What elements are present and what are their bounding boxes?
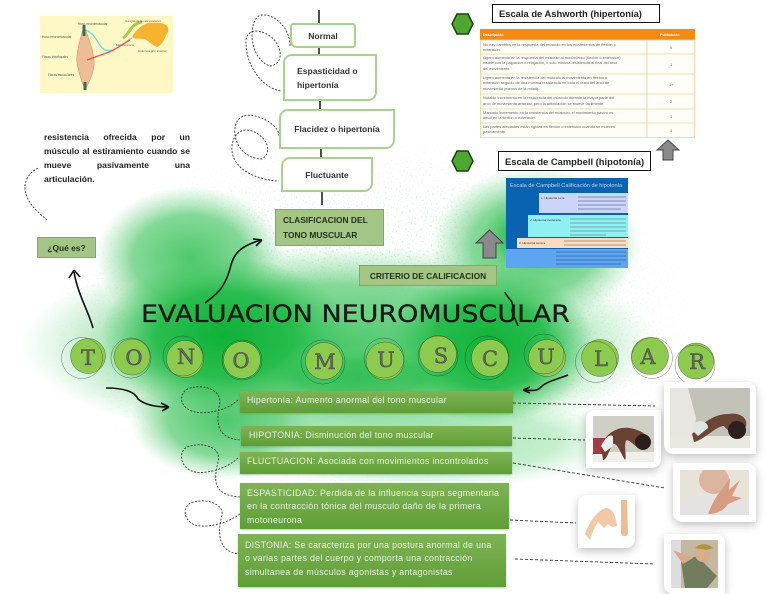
question label: ¿Qué es? <box>47 242 86 252</box>
letter O: O <box>232 349 250 373</box>
criteria label <box>359 265 497 286</box>
table: Ashworth scale: No hay cambios en la respuesta del músculo en los movimientos de flexión o <box>483 42 616 47</box>
table: Ashworth scale: difícil en la flexión o extensión. <box>483 115 536 120</box>
muscle spindle diagram: Motoneurona <box>116 43 134 47</box>
letter U: U <box>537 345 555 369</box>
muscle fibre <box>77 26 94 90</box>
tier 2 <box>528 215 628 237</box>
dashed loops near flow chart <box>25 15 290 220</box>
letter T <box>62 338 106 378</box>
table: Ashworth scale: 3 <box>670 114 672 119</box>
muscle spindle diagram: Fibras intrafusales <box>42 55 68 59</box>
arrow up: Campbell <box>475 229 504 258</box>
table: Campbell scale: Escala de Campbell Calificación de hipotonía <box>510 183 623 189</box>
letter circles: TONO MUSCULAR <box>61 334 716 384</box>
table: Ashworth scale: 1 <box>670 62 672 67</box>
definition: Fluctuacion: FLUCTUACION: Asociada con movimientos incontrolados <box>247 456 489 466</box>
muscle spindle diagram: Fibras musculares <box>48 73 74 77</box>
photo: dystonia posture <box>664 534 725 594</box>
curved arrows <box>69 239 568 411</box>
letter U <box>364 338 404 380</box>
photo: infant hypotonia <box>586 410 661 468</box>
table: Campbell scale: 3. Hipotonía severa <box>519 241 545 245</box>
table: Campbell scale: 1. Hipotonía Leve <box>541 196 565 200</box>
definition: Fluctuacion <box>240 452 512 474</box>
letter O <box>111 338 151 378</box>
flow box: Fluctuante: Fluctuante <box>305 170 349 180</box>
table: Ashworth scale: Notable incremento en la resistencia del músculo durante la mayor parte del <box>483 95 614 100</box>
title: Ashworth scale <box>492 4 660 23</box>
letter M <box>301 340 345 384</box>
table: Ashworth scale: Ligero aumento en la respuesta del músculo al movimiento (flexión ó extensión) <box>483 55 621 60</box>
tier 3 <box>517 238 628 248</box>
dashed connectors to photos <box>510 403 665 564</box>
dashed loops near definitions <box>182 387 240 554</box>
definition: Distonia: o varias partes del cuerpo y comporta una contracción <box>245 553 473 563</box>
photo: infant hypertonia <box>664 382 756 454</box>
table: Ashworth scale: 1+ <box>669 82 674 87</box>
table: Ashworth scale: 0 <box>670 45 673 50</box>
definition: Distonia: DISTONIA: Se caracteriza por una postura anormal de una <box>245 540 492 550</box>
definition: Distonia: simultanea de músculos agonistas y antagonistas <box>245 567 453 577</box>
letter O <box>222 340 262 380</box>
letter N <box>163 336 204 378</box>
table: Ashworth scale: Las partes afectadas están rígidas en flexión o extensión cuando se mueven <box>483 124 615 129</box>
letter A <box>632 338 672 378</box>
table: Ashworth scale: Ligero aumento en la resistencia del músculo al movimiento en flexión o <box>483 75 607 80</box>
flow box: Normal <box>290 23 356 48</box>
hexagon icon: Campbell <box>451 150 474 172</box>
flow spine <box>319 10 322 205</box>
green paint splash background <box>31 148 680 483</box>
flow box: Espasticidad <box>283 54 377 101</box>
letter N: N <box>177 345 195 369</box>
definition: Hipertonia: Hipertonía: Aumento anormal del tono muscular <box>247 395 447 405</box>
table: Ashworth scale: movimiento (menos de la mitad). <box>483 86 539 91</box>
table: Ashworth scale: 4 <box>670 128 673 133</box>
letter A: A <box>639 345 656 369</box>
definition: Hipertonia <box>240 391 513 413</box>
letter M: M <box>314 350 336 374</box>
table: Ashworth scale: 2 <box>670 99 672 104</box>
photo: flexed arm and hand <box>578 495 635 548</box>
letter U <box>524 334 566 376</box>
muscle spindle diagram: Huso neuromuscular <box>78 22 108 26</box>
Campbell lower band <box>506 248 628 268</box>
flow box: Fluctuante <box>281 157 373 192</box>
muscle spindle diagram: Columna gris anterior <box>138 49 167 53</box>
flow box: Flacidez <box>279 109 395 149</box>
definition text: resistencia ofrecida por un músculo al estiramiento cuando se mueve pasivamente una articulación. <box>44 132 190 184</box>
table: Ashworth scale: pasivamente. <box>483 129 506 134</box>
table: Ashworth scale: Marcado incremento en la resistencia del músculo, el movimiento pasivo es <box>483 110 613 115</box>
title: Campbell scale <box>498 151 651 171</box>
letter L: L <box>594 347 608 371</box>
definition: Espasticidad: motoneurona <box>247 515 302 525</box>
table: Campbell scale: 2. Hipotonía moderada <box>530 218 561 222</box>
tier 1 <box>539 193 628 213</box>
letter O: O <box>125 346 143 370</box>
classification label: TONO MUSCULAR <box>283 230 357 240</box>
arrow up: Ashworth <box>656 140 680 160</box>
definition: Espasticidad: en la contracción tónica del musculo daño de la primera <box>247 501 481 511</box>
table: Ashworth scale: extensión seguido de una mínima resistencia en todo el resto del arco de <box>483 80 609 85</box>
flow box: Espasticidad: hipertonía <box>297 80 339 90</box>
hexagon icon: Ashworth <box>451 13 474 35</box>
letter R: R <box>689 350 706 374</box>
letter U: U <box>377 348 395 372</box>
table: Ashworth scale: visible con la palpación o relajación, o solo mínima resistencia al final del arco <box>483 60 617 65</box>
table: Ashworth scale: Puntuación <box>660 33 680 37</box>
letter S: S <box>434 344 448 368</box>
muscle spindle diagram: Ganglio de la raíz posterior <box>125 19 161 23</box>
table: Campbell scale <box>506 178 628 248</box>
speckle <box>62 148 680 483</box>
title: Ashworth scale: Escala de Ashworth (hipertonía) <box>499 8 642 19</box>
title: Campbell scale: Escala de Campbell (hipotonía) <box>505 156 644 166</box>
table: Ashworth scale: arco de movimiento articular, pero la articulación se mueve fácilmente. <box>483 101 604 106</box>
flow box: Normal: Normal <box>308 30 338 40</box>
letter C: C <box>482 347 498 371</box>
question label <box>37 237 96 258</box>
muscle spindle diagram <box>40 16 173 93</box>
nerve fibres <box>86 30 132 51</box>
definition: Hipotonia <box>241 426 512 446</box>
table: Ashworth scale: Descripción <box>483 33 504 37</box>
muscle spindle diagram: Huso neuromuscular <box>42 35 72 39</box>
definition: Espasticidad: ESPASTICIDAD: Perdida de la influencia supra segmentaria <box>247 488 499 498</box>
main title: EVALUACION NEUROMUSCULAR <box>141 300 570 328</box>
flow box: Espasticidad: Espasticidad o <box>297 66 358 76</box>
table: Ashworth scale <box>480 29 695 138</box>
flow box: Flacidez: Flacidez o hipertonía <box>294 124 380 134</box>
criteria label: CRITERIO DE CALIFICACION <box>370 270 486 280</box>
letter C <box>465 336 509 380</box>
definition: Hipotonia: HIPOTONIA: Disminución del tono muscular <box>249 430 434 440</box>
letter L <box>576 340 618 382</box>
letter R <box>675 343 715 385</box>
classification label: CLASIFICACION DEL <box>283 215 368 225</box>
classification label <box>275 209 384 246</box>
header row <box>480 29 695 40</box>
spinal cord <box>132 23 168 47</box>
letter S <box>418 336 458 376</box>
definition: Espasticidad <box>240 483 509 529</box>
table: Ashworth scale: extensión. <box>483 47 501 52</box>
table: Ashworth scale: del movimiento. <box>483 66 510 71</box>
definition: Distonia <box>238 534 506 587</box>
photo: hand fluctuating movement <box>673 463 756 522</box>
letter T: T <box>81 346 95 370</box>
